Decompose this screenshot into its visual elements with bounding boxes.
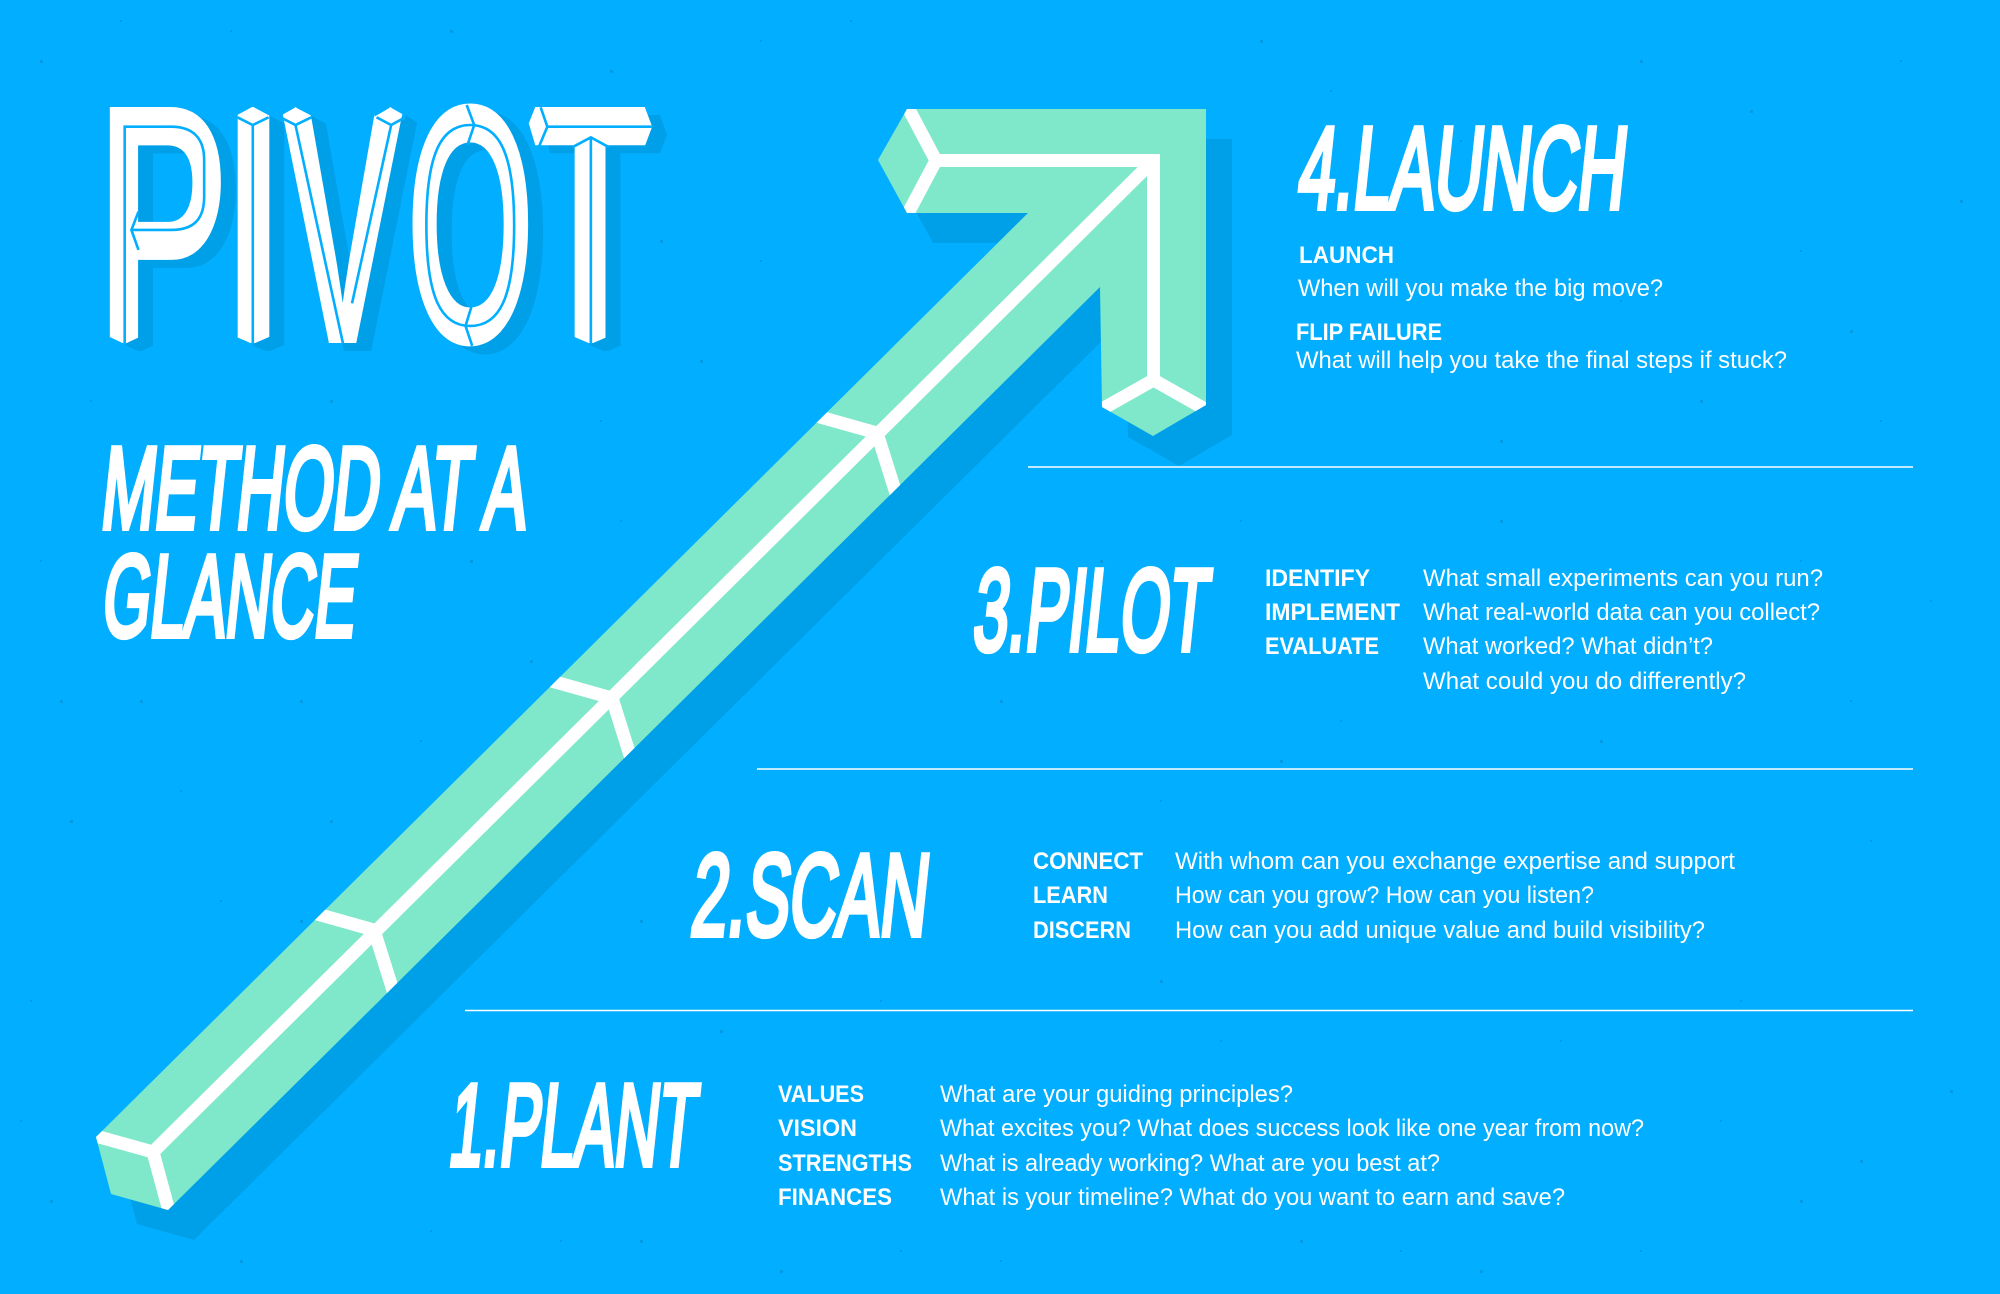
pilot questions: What small experiments can you run? — [1423, 565, 1823, 592]
title letters: V — [280, 33, 406, 416]
title letters: O — [406, 34, 535, 417]
plant labels — [778, 1081, 912, 1211]
scan questions: How can you add unique value and build visibility? — [1175, 917, 1705, 944]
arrow body — [96, 109, 1206, 1210]
title shadow: P — [112, 42, 243, 425]
arrow white edges — [85, 102, 1212, 1222]
plant questions: What is your timeline? What do you want to earn and save? — [940, 1184, 1565, 1211]
title shadow: O — [421, 42, 550, 425]
plant questions: What excites you? What does success look like one year from now? — [940, 1115, 1644, 1142]
heading 2.SCAN: 2.SCAN — [686, 830, 936, 960]
heading 3.PILOT: 3.PILOT — [968, 545, 1216, 675]
title letters: P — [97, 34, 228, 417]
plant labels: VISION — [778, 1115, 857, 1142]
scan questions — [1175, 848, 1735, 944]
title shadow: T — [540, 40, 670, 424]
title letters: I — [223, 33, 284, 417]
subtitle line 2: GLANCE — [97, 531, 364, 661]
title: PIVOT — [110, 104, 667, 354]
pilot labels: EVALUATE — [1265, 633, 1379, 660]
title letters — [110, 104, 654, 346]
pilot labels: IDENTIFY — [1265, 565, 1370, 592]
pilot questions — [1423, 565, 1823, 695]
scan labels — [1033, 848, 1143, 944]
flip failure question: What will help you take the final steps if stuck? — [1296, 347, 1787, 374]
arrow shadow — [122, 139, 1232, 1240]
section 3: pilot — [968, 545, 1823, 695]
section 1: plant — [444, 1060, 1644, 1211]
section 2: scan — [686, 830, 1735, 960]
title shadow — [125, 113, 667, 354]
scan labels: CONNECT — [1033, 848, 1143, 875]
pilot labels: IMPLEMENT — [1265, 599, 1400, 626]
plant labels: STRENGTHS — [778, 1150, 912, 1177]
heading 1.PLANT: 1.PLANT — [444, 1060, 704, 1190]
scan labels: LEARN — [1033, 882, 1108, 909]
heading 4.LAUNCH: 4.LAUNCH — [1293, 103, 1634, 233]
subtitle line 1: METHOD AT A — [96, 423, 535, 553]
launch label: LAUNCH — [1299, 242, 1394, 269]
pilot labels — [1265, 565, 1400, 660]
title shadow: V — [295, 41, 421, 424]
plant questions: What are your guiding principles? — [940, 1081, 1293, 1108]
scan questions: With whom can you exchange expertise and support — [1175, 848, 1735, 875]
pilot questions: What could you do differently? — [1423, 668, 1746, 695]
plant labels: FINANCES — [778, 1184, 892, 1211]
title letters: T — [525, 32, 655, 416]
pilot questions: What worked? What didn’t? — [1423, 633, 1713, 660]
launch question: When will you make the big move? — [1298, 275, 1663, 302]
flip failure label: FLIP FAILURE — [1296, 319, 1442, 346]
scan labels: DISCERN — [1033, 917, 1131, 944]
plant questions: What is already working? What are you best at? — [940, 1150, 1440, 1177]
plant labels: VALUES — [778, 1081, 864, 1108]
section 4: launch — [1293, 103, 1787, 374]
divider lines — [465, 467, 1913, 1010]
pilot questions: What real-world data can you collect? — [1423, 599, 1820, 626]
scan questions: How can you grow? How can you listen? — [1175, 882, 1594, 909]
arrow — [85, 102, 1232, 1240]
plant questions — [940, 1081, 1644, 1211]
title shadow: I — [238, 41, 299, 425]
subtitle: method at a glance — [96, 423, 535, 661]
